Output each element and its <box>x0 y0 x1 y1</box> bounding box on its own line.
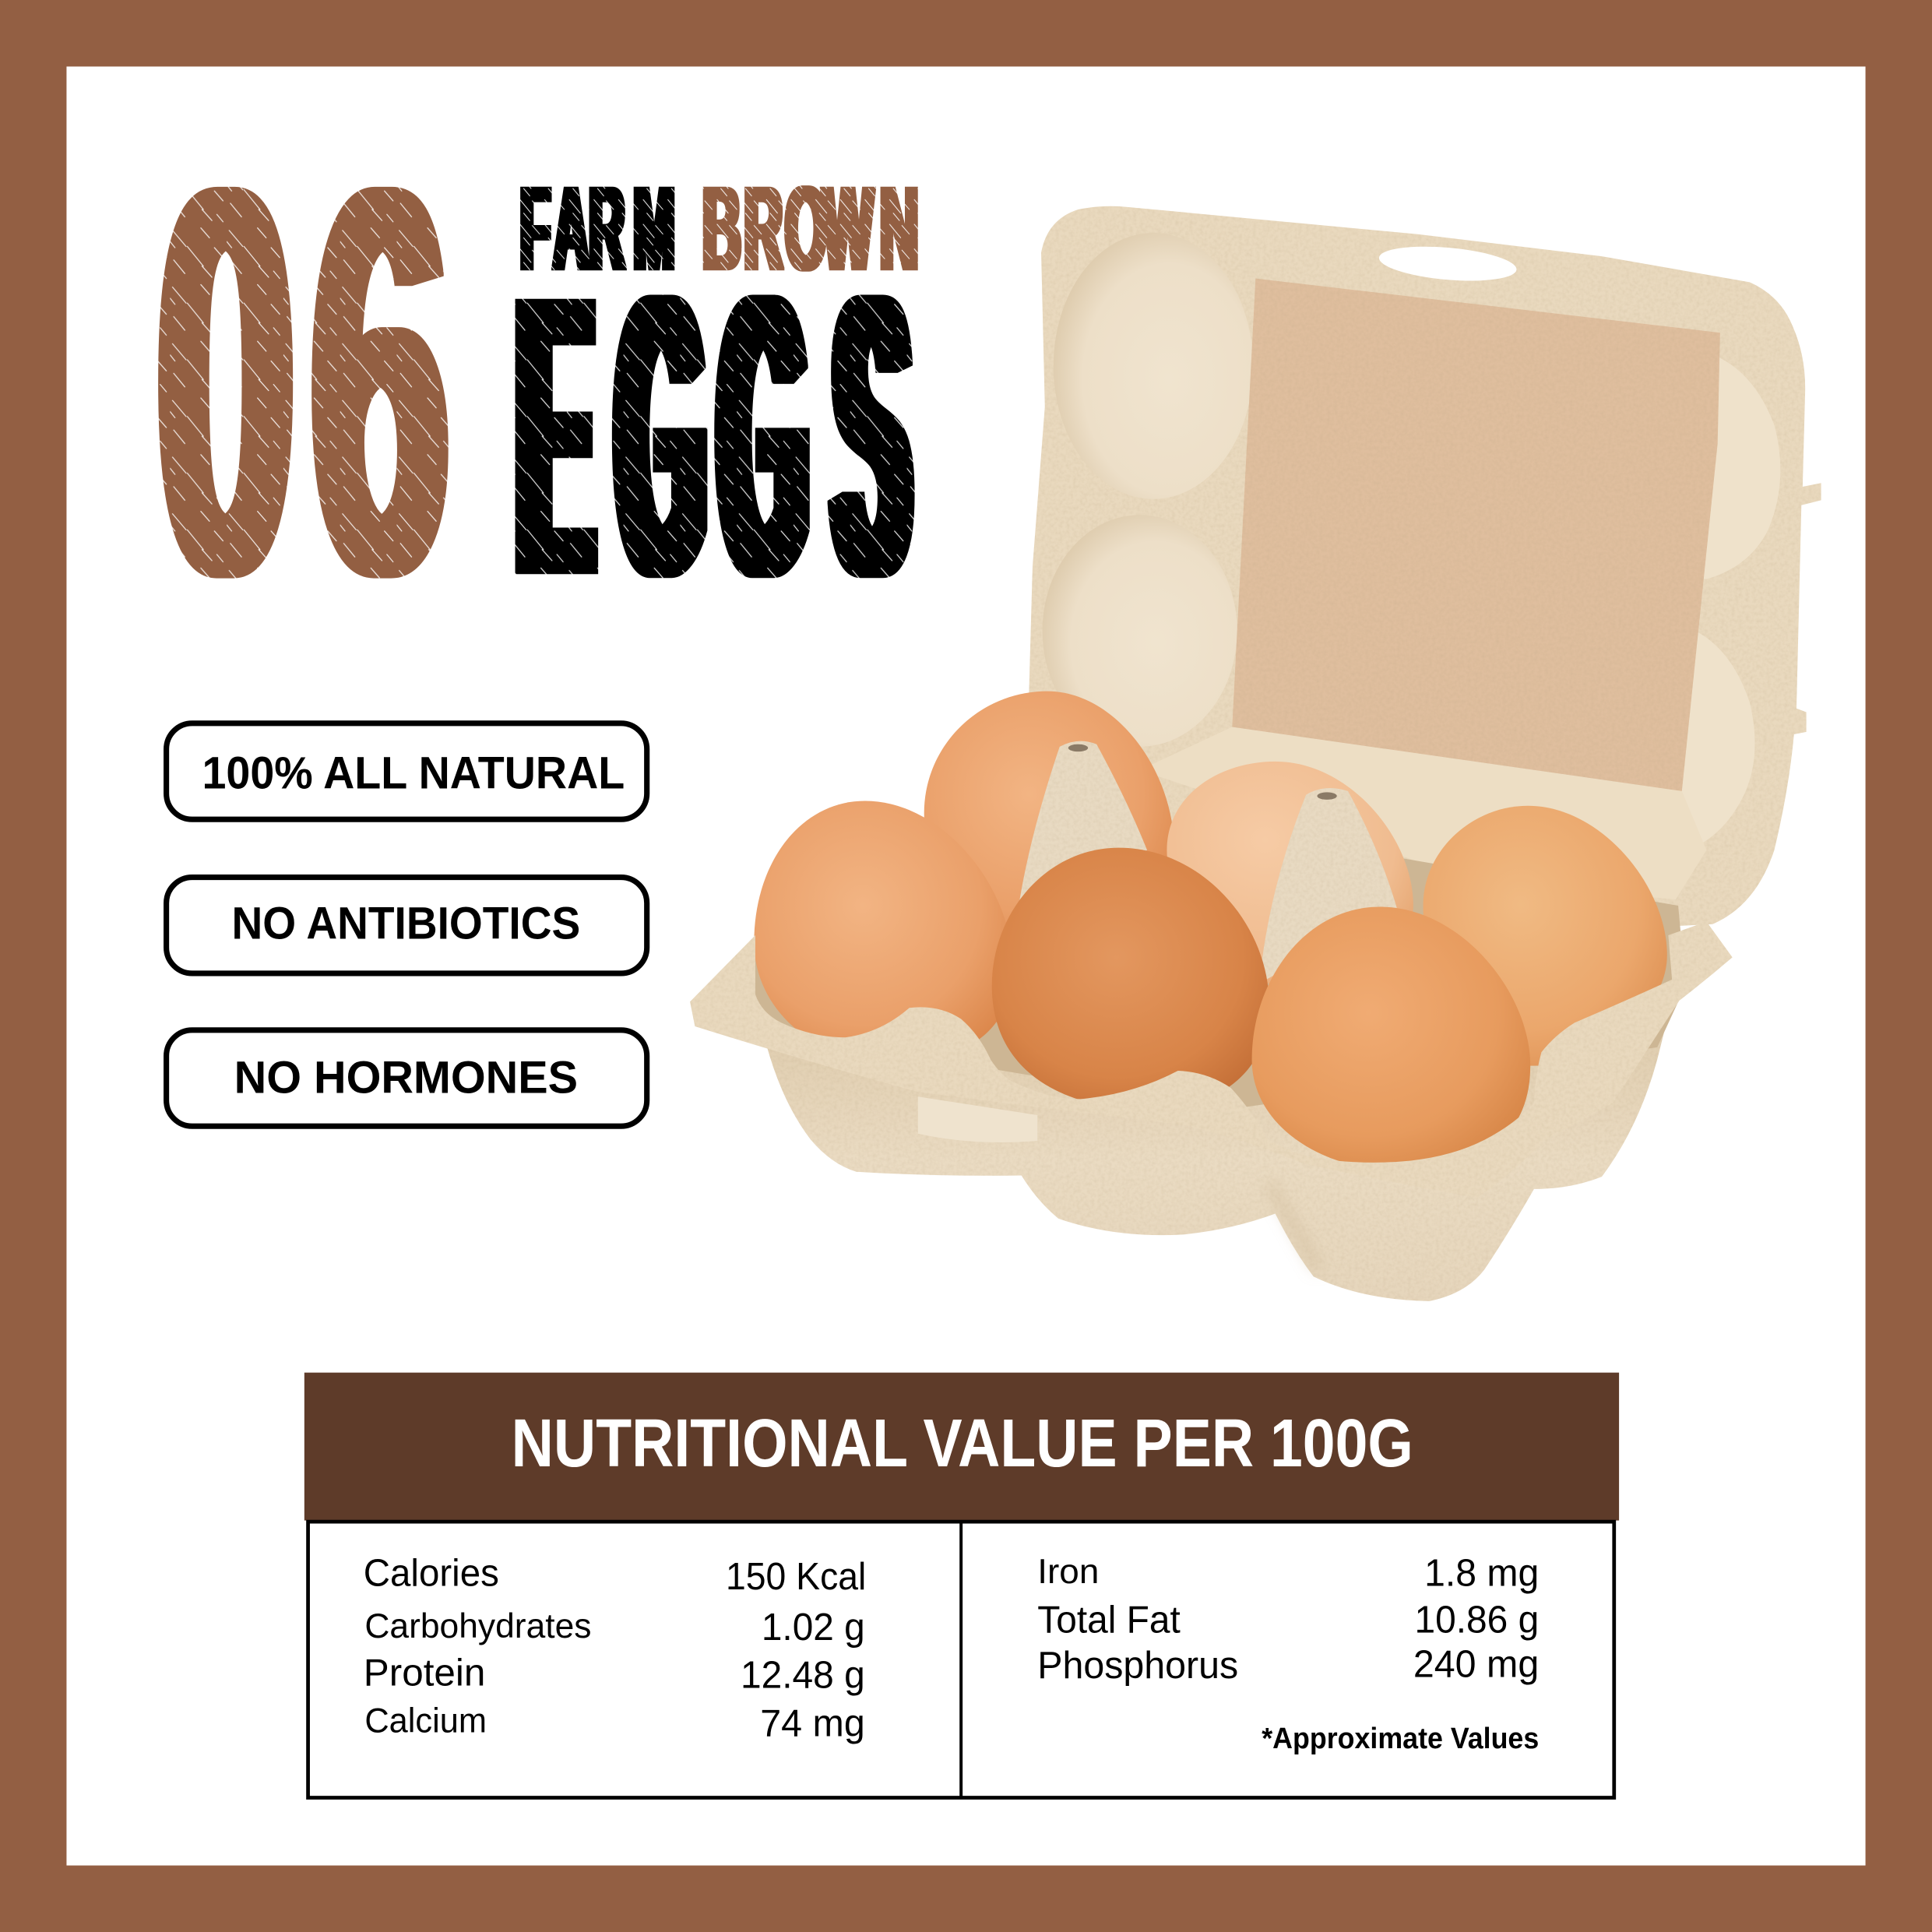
egg: back left <box>924 692 1174 948</box>
right column: nutrient rows: Phosphorus <box>1037 1645 1238 1687</box>
right column: nutrient rows: Iron <box>1037 1553 1099 1591</box>
tray interior <box>739 850 1686 1109</box>
right column: nutrient rows: Total Fat <box>1037 1599 1181 1642</box>
pill: 100% all natural: 100% ALL NATURAL <box>202 748 625 799</box>
heading: farm brown eggs: BROWN <box>702 162 918 294</box>
egg: right <box>1423 806 1667 1066</box>
left column: nutrient rows: Protein <box>364 1652 485 1694</box>
big number 06: 06 <box>157 75 466 688</box>
carton cone: front <box>1259 788 1397 984</box>
carton handle hole <box>1378 241 1518 286</box>
kraft paper label <box>1232 279 1720 791</box>
left column: nutrient rows: 1.02 g <box>762 1606 865 1649</box>
nutrition table body <box>308 1522 1614 1798</box>
carton lid <box>1029 206 1821 937</box>
egg: front <box>1252 907 1530 1171</box>
lid left cups <box>1043 233 1253 747</box>
footnote: approximate values: *Approximate Values <box>1262 1723 1539 1755</box>
heading: farm brown eggs: FARM <box>520 163 675 294</box>
left column: nutrient rows: 12.48 g <box>741 1655 865 1697</box>
nutrition table header: NUTRITIONAL VALUE PER 100G <box>512 1406 1413 1481</box>
pill: no antibiotics <box>167 878 647 973</box>
right column: nutrient rows <box>1037 1552 1539 1687</box>
lower lid band <box>1140 727 1706 899</box>
egg: centre <box>992 848 1269 1110</box>
left column: nutrient rows: 74 mg <box>760 1702 865 1744</box>
right column: nutrient rows: 10.86 g <box>1414 1599 1539 1642</box>
carton cone: back <box>1018 741 1147 912</box>
egg: left <box>754 801 1013 1062</box>
left column: nutrient rows: Calories <box>364 1552 499 1594</box>
egg: back right <box>1167 762 1413 986</box>
pill: 100% all natural <box>167 723 647 819</box>
pill: no antibiotics: NO ANTIBIOTICS <box>231 899 580 949</box>
left column: nutrient rows: 150 Kcal <box>726 1556 866 1598</box>
lid right cups <box>1676 357 1780 850</box>
left column: nutrient rows <box>364 1552 866 1744</box>
heading: farm brown eggs: EGGS <box>519 215 908 658</box>
illustration: egg carton with six brown eggs <box>690 206 1821 1301</box>
carton base <box>766 986 1676 1301</box>
left column: nutrient rows: Calcium <box>364 1702 487 1740</box>
right column: nutrient rows: 1.8 mg <box>1424 1552 1539 1594</box>
right column: nutrient rows: 240 mg <box>1413 1643 1539 1685</box>
pill: no hormones: NO HORMONES <box>234 1052 578 1103</box>
carton front rim <box>690 922 1733 1198</box>
pill: no hormones <box>167 1030 647 1126</box>
nutrition table header <box>304 1373 1619 1521</box>
left column: nutrient rows: Carbohydrates <box>364 1607 591 1645</box>
